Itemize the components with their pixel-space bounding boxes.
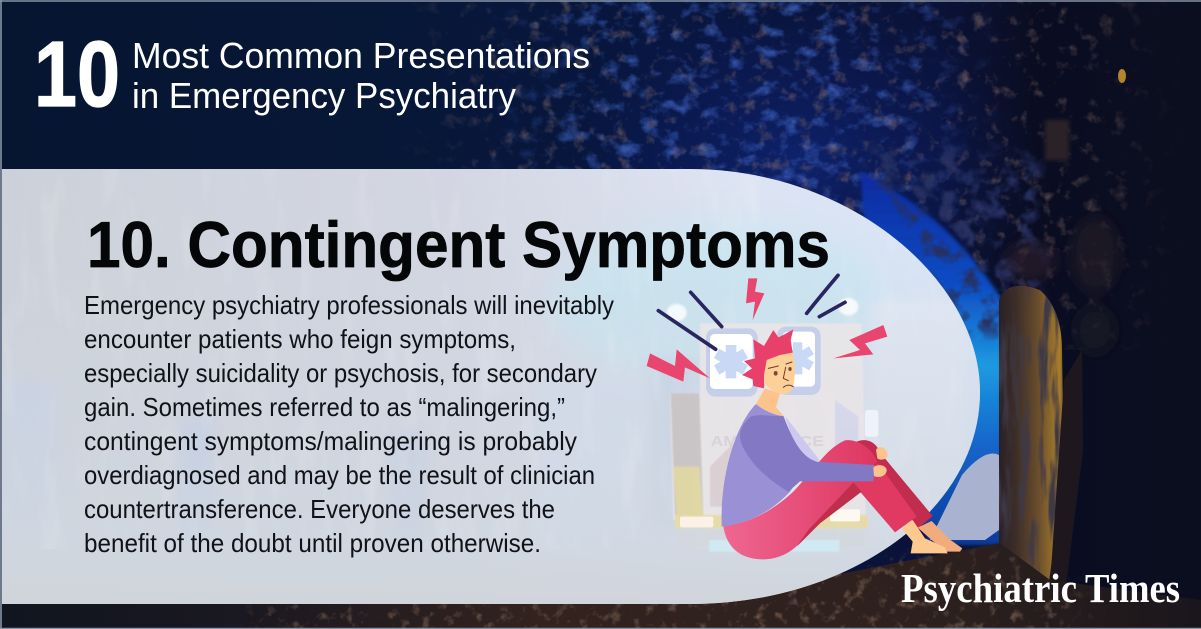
person: far leg: [857, 440, 933, 528]
person: neck and head: [742, 329, 795, 416]
big number 10: 10: [34, 22, 120, 126]
dim foliage on the tree: [1004, 217, 1119, 354]
body text block: contingent symptoms/malingering is probably: [84, 426, 577, 456]
body text block: especially suicidality or psychosis, for secondary: [84, 358, 597, 388]
impact lines: [658, 275, 845, 349]
ground: [0, 540, 1201, 629]
person: near foot: [902, 520, 948, 553]
person: hips and thigh: [723, 440, 877, 559]
pale roadside shrub: [930, 454, 999, 540]
ambulance lettering: AMBULANCE: [711, 433, 824, 450]
person: thigh shadow: [797, 483, 862, 547]
warm lamp highlight: [1118, 69, 1126, 83]
lightning bolts: [647, 278, 887, 382]
body text block: Emergency psychiatry professionals will inevitably: [84, 290, 614, 320]
body text block: gain. Sometimes referred to as “malingering,”: [84, 392, 565, 422]
body text block: countertransference. Everyone deserves the: [84, 494, 555, 524]
main header: [34, 22, 590, 126]
illustration: ambulance and distressed person: [647, 275, 962, 559]
person: near lower leg: [850, 463, 917, 532]
person: sweater arm: [740, 415, 875, 492]
window asterisks: [714, 342, 814, 378]
face features: [768, 362, 793, 387]
body text block: benefit of the doubt until proven otherwise.: [84, 528, 541, 558]
person: sweater torso: [722, 404, 807, 527]
header line 1: Most Common Presentations: [132, 35, 590, 76]
panel: translucent rounded content panel: [0, 169, 982, 604]
body text block: [84, 290, 614, 558]
bright blue light behind tree: [860, 172, 1002, 545]
body text block: encounter patients who feign symptoms,: [84, 324, 516, 354]
body text block: overdiagnosed and may be the result of clinician: [84, 460, 595, 490]
person: hands: [873, 447, 888, 477]
header line 2: in Emergency Psychiatry: [132, 75, 516, 116]
faded ambulance: [667, 298, 878, 552]
tree trunk lit orange: [995, 120, 1083, 605]
logo: Psychiatric Times: Psychiatric: [901, 565, 1077, 611]
panel heading: 10. Contingent Symptoms: [87, 208, 830, 281]
spiky hair: [742, 329, 793, 388]
person: sweater back: [785, 416, 820, 462]
logo: Psychiatric Times: Times: [1085, 565, 1180, 611]
person: far foot: [918, 521, 962, 552]
